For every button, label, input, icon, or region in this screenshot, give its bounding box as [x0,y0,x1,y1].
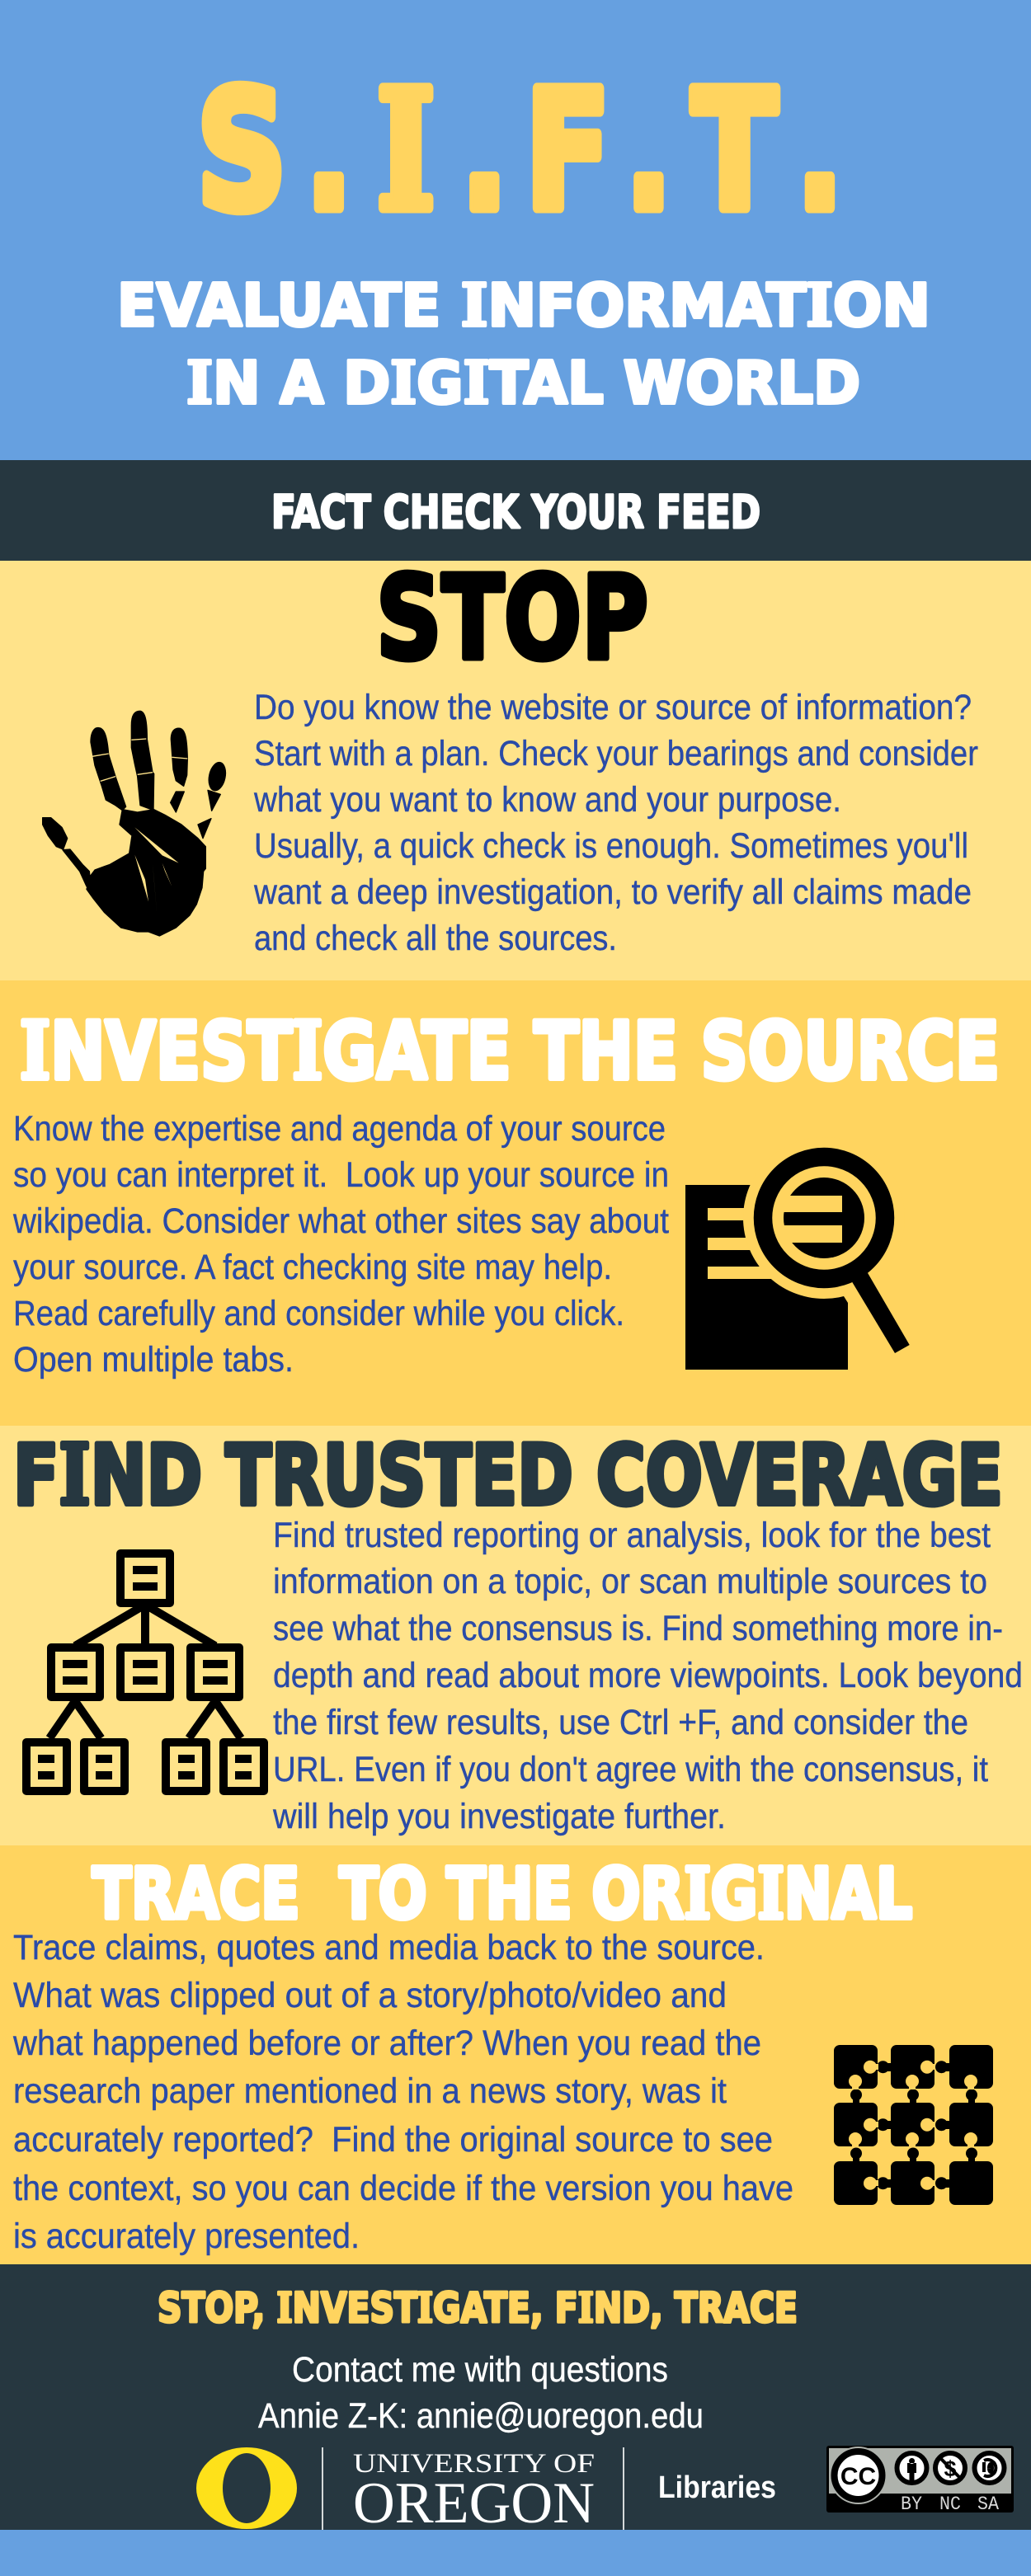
heading: stop: STOP [376,552,648,686]
badge: creative commons: NC [939,2494,961,2515]
text block: stop [253,688,978,958]
text block: investigate: Open multiple tabs. [13,1340,294,1380]
contact text: Contact me with questions [292,2350,668,2390]
logo: university of oregon libraries: OREGON [353,2471,595,2536]
subtitle: IN A DIGITAL WORLD [186,348,860,417]
icon: hierarchy tree [26,1554,264,1791]
text block: stop: and check all the sources. [254,919,617,958]
text block: investigate: wikipedia. Consider what other sites say about [12,1201,669,1241]
text block: trace: What was clipped out of a story/photo/video and [13,1976,727,2015]
text block: trace: accurately reported? Find the original source to see [13,2120,773,2160]
badge: creative commons: $ [944,2456,957,2481]
logo: university of oregon libraries: Libraries [658,2470,776,2505]
text block: trace [12,1928,793,2256]
text block: investigate: so you can interpret it. Look up your source in [13,1155,669,1195]
text block: investigate: your source. A fact checking site may help. [13,1248,612,1287]
icon: document and magnifier [685,1137,910,1370]
text block: trace: research paper mentioned in a news story, was it [13,2071,727,2111]
subtitle [117,270,930,417]
text block: trace: what happened before or after? When you read the [12,2024,761,2063]
text block: stop: want a deep investigation, to verify all claims made [253,872,972,912]
text block: find: will help you investigate further. [272,1797,726,1836]
badge: creative commons: SA [977,2494,999,2515]
text block: stop: what you want to know and your purpose. [253,780,841,820]
text block: trace: Trace claims, quotes and media back to the source. [13,1928,765,1967]
panel: find [0,1426,1031,1845]
title: S.I.F.T. [197,54,844,247]
text block: stop: Do you know the website or source of information? [254,688,972,727]
banner heading: FACT CHECK YOUR FEED [271,486,760,538]
panel: fact check banner [0,460,1031,561]
panel: footer [0,2264,1031,2536]
text block: investigate: Read carefully and consider while you click. [13,1294,624,1333]
panel: investigate [0,980,1031,1426]
badge: creative commons: CC [840,2463,876,2490]
icon: puzzle pieces [834,2045,993,2205]
text block: stop: Usually, a quick check is enough. Sometimes you'll [254,826,968,866]
logo: university of oregon libraries [196,2447,776,2536]
icon: hand print [43,711,228,936]
text block: investigate: Know the expertise and agenda of your source [13,1109,666,1149]
heading: trace: TRACE TO THE ORIGINAL [92,1853,912,1935]
badge: creative commons [826,2446,1014,2515]
subtitle: EVALUATE INFORMATION [117,270,930,340]
text block: find: the first few results, use Ctrl +F, and consider the [273,1703,968,1742]
logo: university of oregon libraries: UNIVERSITY OF [353,2449,595,2479]
contact text: Annie Z-K: annie@uoregon.edu [258,2396,704,2436]
badge: creative commons: BY [901,2494,922,2515]
text block: find: information on a topic, or scan multiple sources to [273,1562,987,1601]
panel: stop [0,552,1031,980]
text block: find [272,1516,1023,1836]
footer heading: STOP, INVESTIGATE, FIND, TRACE [158,2283,798,2332]
text block: trace: the context, so you can decide if the version you have [13,2169,793,2208]
panel: bottom band [0,2530,1031,2576]
text block: investigate [12,1109,669,1380]
contact text [258,2350,704,2436]
panel: header [0,0,1031,460]
panel: trace [0,1845,1031,2264]
text block: trace: is accurately presented. [13,2216,360,2256]
